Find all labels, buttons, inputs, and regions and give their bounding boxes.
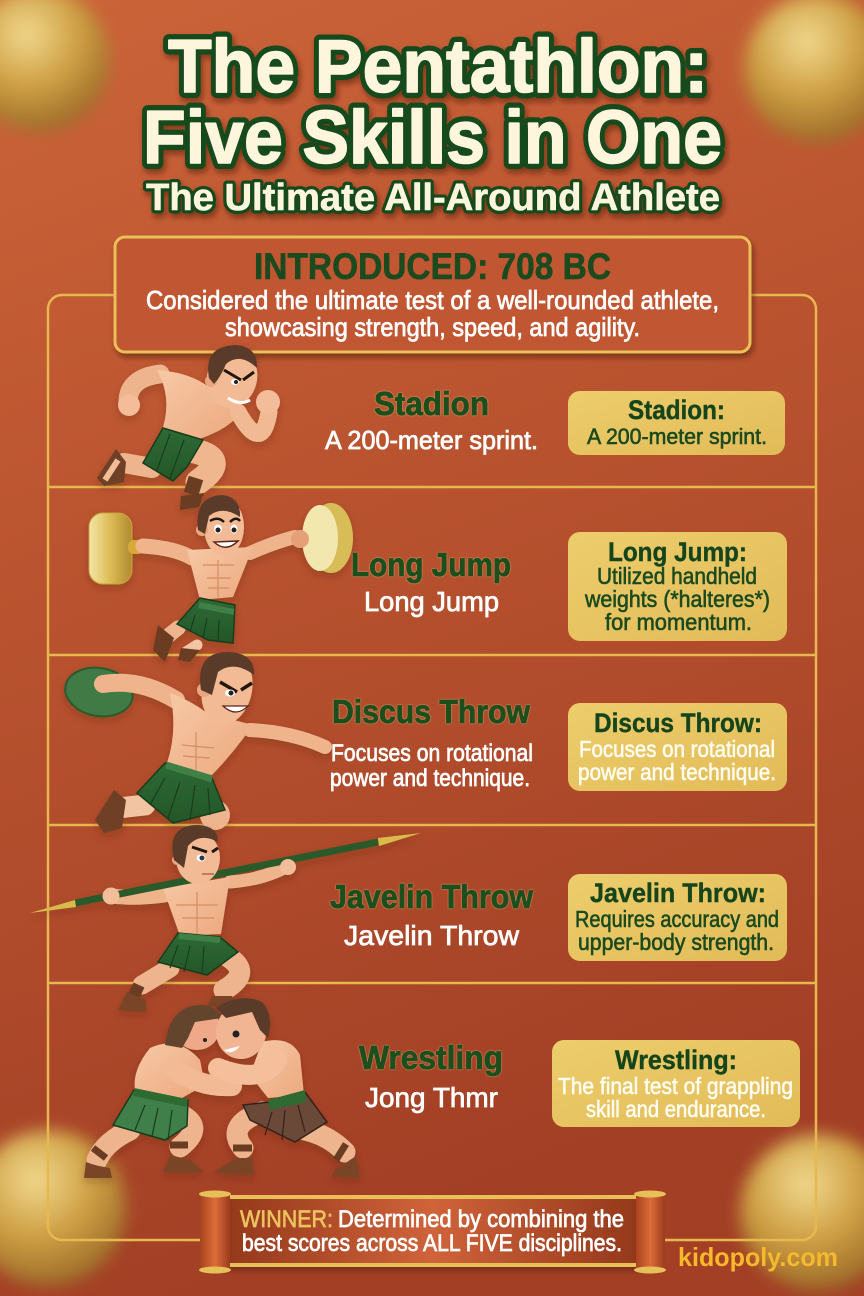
- introduction text: showcasing strength, speed, and agility.: [225, 312, 640, 342]
- winner text: Determined by combining the: [338, 1206, 624, 1233]
- heading: Javelin Throw: Javelin Throw: [330, 878, 533, 915]
- text: Discus Throw: [330, 740, 533, 792]
- card: Wrestling: The final test of grappling: [558, 1073, 793, 1099]
- card: Javelin Throw: Requires accuracy and: [575, 906, 779, 932]
- card: Wrestling: [552, 1040, 800, 1127]
- brand: kidopoly.com: kidopoly.com: [678, 1242, 838, 1272]
- card: Stadion: A 200-meter sprint.: [587, 424, 767, 449]
- decorative gold orb top left: [0, 0, 110, 132]
- heading: Stadion: Stadion: [374, 385, 489, 422]
- card: Stadion: [568, 391, 785, 455]
- title: The Pentathlon:: [168, 24, 708, 108]
- title: Five Skills in One: [143, 95, 722, 179]
- introduction text: [146, 285, 719, 342]
- card: Javelin Throw: upper-body strength.: [578, 929, 774, 955]
- card: Long Jump: Utilized handheld: [597, 563, 757, 589]
- decorative gold orb top right: [744, 0, 864, 142]
- panel: introduction box: [115, 237, 750, 352]
- heading: Long Jump: Long Jump: [351, 546, 511, 583]
- icon: sprinter: [97, 343, 280, 510]
- text: Stadion: A 200-meter sprint.: [325, 425, 538, 455]
- card: Discus Throw: [568, 703, 787, 791]
- card: Long Jump: Long Jump:: [608, 537, 747, 567]
- icon: discus thrower: [61, 649, 333, 833]
- card: Discus Throw: Discus Throw:: [594, 708, 762, 738]
- card: Wrestling: Wrestling:: [615, 1045, 737, 1075]
- text: Wrestling: Jong Thmr: [365, 1082, 498, 1113]
- winner text: WINNER:: [240, 1206, 333, 1233]
- winner text: best scores across ALL FIVE disciplines.: [242, 1230, 622, 1257]
- card: Wrestling: skill and endurance.: [586, 1096, 766, 1122]
- subtitle: The Ultimate All-Around Athlete: [146, 177, 720, 219]
- card: Stadion: Stadion:: [628, 395, 725, 425]
- heading: Wrestling: Wrestling: [359, 1039, 503, 1076]
- subtitle: The Ultimate All-Around Athlete: [146, 177, 720, 219]
- text: Javelin Throw: Javelin Throw: [344, 920, 520, 951]
- title: The Pentathlon:: [168, 24, 708, 108]
- decorative gold orb bottom right: [740, 1134, 864, 1290]
- panel: discipline frame: [48, 295, 816, 1240]
- text: Long Jump: Long Jump: [364, 586, 499, 617]
- decorative gold orb bottom left: [0, 1130, 126, 1286]
- card: Javelin Throw: Javelin Throw:: [590, 878, 766, 908]
- winner text: [240, 1206, 624, 1257]
- introduction heading: INTRODUCED: 708 BC: [254, 246, 611, 287]
- icon: long jumper with halteres: [89, 495, 353, 662]
- card: Long Jump: [568, 532, 787, 641]
- introduction text: Considered the ultimate test of a well-rounded athlete,: [146, 285, 719, 315]
- banner: winner scroll: [199, 1190, 666, 1274]
- card: Long Jump: weights (*halteres*): [584, 586, 770, 612]
- card: Discus Throw: power and technique.: [578, 759, 776, 785]
- title: Five Skills in One: [143, 95, 722, 179]
- title: [143, 24, 722, 179]
- heading: Discus Throw: Discus Throw: [332, 693, 530, 730]
- card: Javelin Throw: [568, 874, 787, 961]
- card: Long Jump: for momentum.: [605, 609, 752, 635]
- card: Discus Throw: Focuses on rotational: [579, 736, 775, 762]
- text: Discus Throw: power and technique.: [330, 765, 530, 792]
- icon: wrestlers: [84, 998, 360, 1178]
- text: Discus Throw: Focuses on rotational: [331, 740, 533, 767]
- icon: javelin thrower: [30, 825, 421, 1012]
